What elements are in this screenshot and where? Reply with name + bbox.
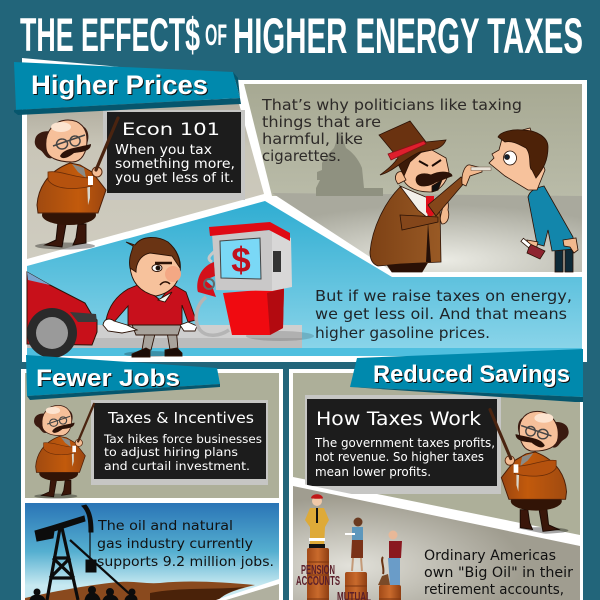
text: gasoline prices: But if we raise taxes on energy, [315, 287, 572, 305]
white frame: top section [22, 58, 587, 362]
text: ordinary americans: own "Big Oil" in their [424, 565, 573, 581]
chalkboard: how taxes work: mean lower profits. [315, 464, 431, 479]
text: politicians [261, 96, 522, 165]
icon: capitol silhouette [316, 131, 383, 196]
chalkboard: how taxes work [305, 395, 501, 494]
panel: reduced savings frame [289, 369, 583, 600]
text: oil jobs: gas industry currently [97, 536, 253, 552]
text: oil jobs [97, 518, 274, 570]
banner: fewer jobs [26, 355, 220, 400]
chalkboard: how taxes work: The government taxes profits, [314, 435, 495, 450]
text: oil jobs: supports 9.2 million jobs. [97, 554, 274, 570]
text: ordinary americans: retirement accounts, [424, 582, 564, 598]
panel: econ 101 [27, 100, 264, 259]
chalkboard: taxes and incentives [91, 400, 268, 485]
label: pension accounts: PENSION [301, 562, 335, 577]
chalkboard: econ 101: something more, [115, 157, 235, 172]
chalkboard: taxes and incentives: and curtail investment. [104, 459, 250, 473]
text: gasoline prices [315, 287, 572, 342]
title: THE EFFECT$ [20, 8, 200, 61]
text: ordinary americans: Ordinary Americas [424, 548, 556, 564]
panel: taxes and incentives [25, 373, 279, 499]
icon: barrels [307, 548, 401, 600]
icon: professor [490, 410, 569, 534]
icon: old man with dog [378, 530, 402, 585]
text: politicians: cigarettes. [262, 147, 341, 165]
title: OF [205, 19, 227, 52]
chalkboard: econ 101 [103, 110, 245, 200]
label: pension accounts [296, 562, 340, 588]
panel: politician and cigarette [244, 84, 582, 272]
chalkboard: econ 101: When you tax [115, 143, 212, 158]
chalkboard: how taxes work: How Taxes Work [316, 408, 481, 430]
panel: higher gasoline prices [27, 201, 582, 358]
banner: fewer jobs: Fewer Jobs [36, 365, 180, 392]
chalkboard: how taxes work: not revenue. So higher taxes [315, 449, 484, 464]
icon: red car [27, 272, 97, 358]
text: oil jobs: The oil and natural [97, 518, 233, 534]
chalkboard: econ 101: you get less of it. [115, 171, 234, 186]
label: pension accounts: ACCOUNTS [296, 573, 340, 588]
panel: oil jobs [25, 503, 279, 600]
icon: gas pump: $ [231, 241, 251, 280]
banner: higher prices [14, 62, 241, 115]
chalkboard: taxes and incentives: Taxes & Incentives [107, 409, 254, 427]
icon: professor [35, 118, 118, 250]
banner: higher prices: Higher Prices [31, 70, 208, 100]
icon: firefighter [305, 494, 329, 548]
icon: professor [34, 404, 94, 499]
gray corner [216, 579, 279, 600]
road strip [27, 325, 302, 348]
panel: fewer jobs frame [21, 369, 283, 600]
chalkboard: taxes and incentives: to adjust hiring plans [104, 445, 238, 459]
text: politicians: things that are [262, 113, 381, 131]
icon: man with empty pockets [103, 237, 197, 357]
icon: politician [370, 121, 491, 272]
icon: pump jack [30, 505, 137, 600]
panel: ordinary americans [293, 482, 580, 600]
text: politicians: That’s why politicians like taxing [261, 96, 522, 114]
text: politicians: harmful, like [262, 130, 363, 148]
text: ordinary americans [424, 548, 573, 598]
icon: man with cigarette in mouth [489, 128, 578, 272]
icon: gas pump [196, 222, 314, 341]
banner: reduced savings: Reduced Savings [373, 361, 570, 388]
title [20, 8, 583, 64]
chalkboard: econ 101: Econ 101 [122, 120, 220, 140]
chalkboard: taxes and incentives: Tax hikes force businesses [103, 432, 262, 446]
text: gasoline prices: we get less oil. And that means [315, 305, 567, 323]
panel: how taxes work [293, 373, 580, 535]
text: gasoline prices: higher gasoline prices. [315, 324, 490, 342]
icon: woman with plate [345, 518, 363, 571]
banner: reduced savings [350, 349, 583, 402]
hills [25, 582, 255, 600]
